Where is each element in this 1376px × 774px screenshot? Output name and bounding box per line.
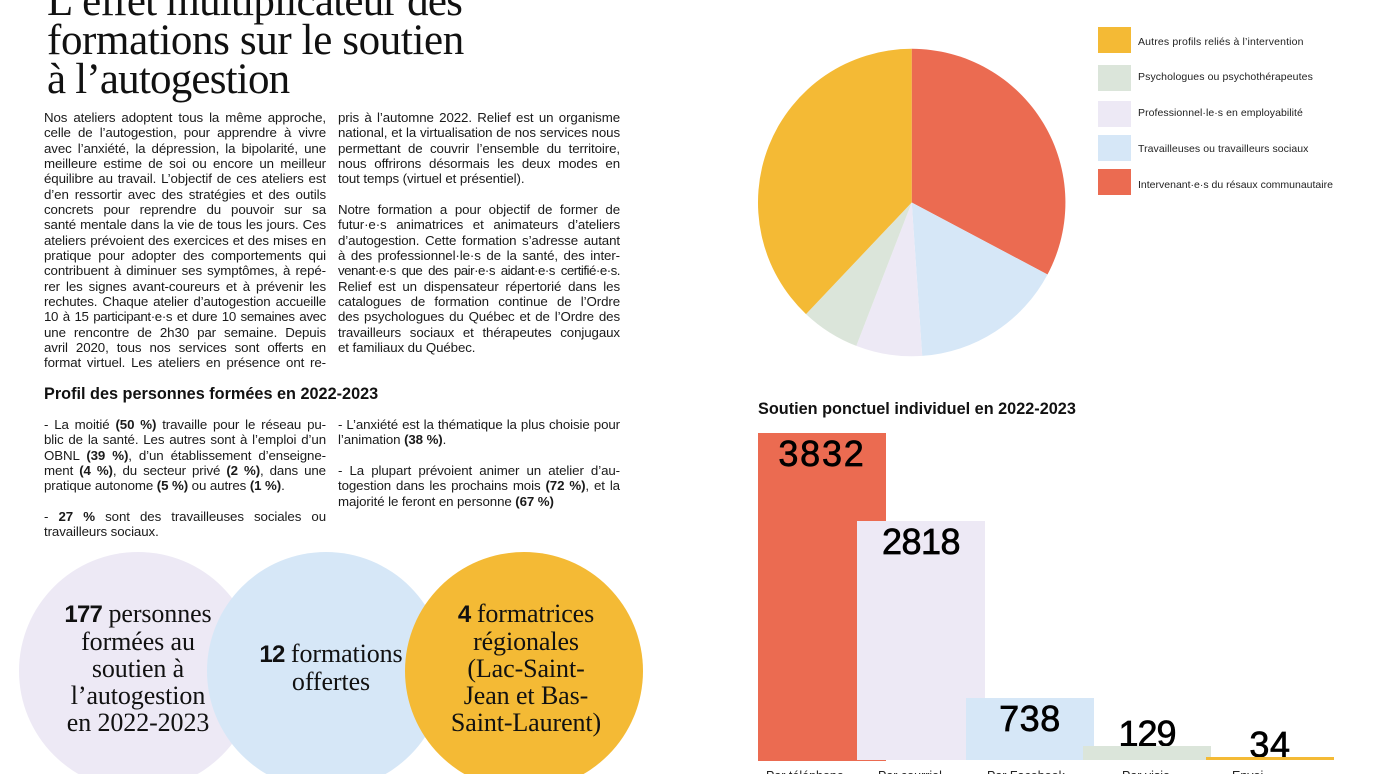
- heading: profil des personnes formées: Profil des personnes formées en 2022-2023: [44, 385, 378, 403]
- text block: intro column 1: avril 2020, tous nos services sont offerts en: [44, 340, 326, 355]
- text block: intro column 1: pratique pour adopter des comportements qui: [44, 248, 326, 263]
- text block: intro column 1: rechutes. Chaque atelier d’autogestion accueille: [44, 294, 326, 309]
- bar: 3832: [758, 433, 886, 761]
- text block: intro column 2: futur·e·s animatrices et animateurs d’ateliers: [338, 217, 620, 232]
- circle text: 4 formatrices: Saint-Laurent): [451, 708, 601, 737]
- pie slice: employabilité: [856, 202, 922, 356]
- text block: intro column 1: une rencontre de 2h30 par semaine. Depuis: [44, 325, 326, 340]
- text block: profil column 1: blic de la santé. Les autres sont à l’emploi d’un: [44, 432, 326, 447]
- value: 738: 738: [999, 698, 1061, 739]
- text block: intro column 1: ateliers prévoient des exercices et des mises en: [44, 233, 326, 248]
- text block: intro column 2: à des professionnel·le·s de la santé, des inter-: [338, 248, 620, 263]
- bar: 738: [966, 698, 1094, 760]
- text block: intro column 2: Relief est un dispensateur répertorié dans les: [338, 279, 620, 294]
- text block: intro column 2: Notre formation a pour objectif de former de: [338, 202, 620, 217]
- circle text: 177 personnes: [64, 599, 212, 737]
- circle text: 12 formations: offertes: [292, 667, 370, 696]
- pie slice: travailleuses sociales: [912, 202, 1048, 356]
- value: 3832: 3832: [778, 433, 866, 474]
- text block: intro column 1: concrets pour reprendre du pouvoir sur sa: [44, 202, 326, 217]
- legend swatch: employabilité: [1098, 101, 1131, 127]
- text block: intro column 2: des psychologues du Québec et de l’Ordre des: [338, 309, 620, 324]
- circle: formatrices régionales: [405, 552, 643, 774]
- circle text: 4 formatrices: [451, 599, 601, 737]
- value: 34: 34: [1249, 724, 1291, 765]
- text block: intro column 1: d’en ressortir avec des stratégies et des outils: [44, 187, 326, 202]
- text block: intro column 1: contribuent à diminuer ses symptômes, à repé-: [44, 263, 326, 278]
- legend label: autres profils: Autres profils reliés à l’intervention: [1138, 36, 1304, 48]
- text block: intro column 1: format virtuel. Les ateliers en présence ont re-: [44, 355, 326, 370]
- text block: intro column 1: rer les signes avant-coureurs et à prévenir les: [44, 279, 326, 294]
- text block: profil column 2: l’animation (38 %).: [338, 432, 446, 447]
- text block: profil column 1: - 27 % sont des travailleuses sociales ou: [44, 509, 326, 524]
- circle: formations offertes: [207, 552, 445, 774]
- text block: intro column 2: d’autogestion. Cette formation s’adresse autant: [338, 233, 620, 248]
- text block: profil column 2: majorité le feront en personne (67 %): [338, 494, 554, 509]
- text block: profil column 1: [44, 417, 326, 539]
- text block: profil column 2: - La plupart prévoient animer un atelier d’au-: [338, 463, 620, 478]
- text block: intro column 1: avec l’anxiété, la dépression, la bipolarité, une: [44, 141, 326, 156]
- circle text: 177 personnes: formées au: [81, 627, 195, 656]
- text block: intro column 1: santé mentale dans la vie de tous les jours. Ces: [44, 217, 326, 232]
- text block: profil column 1: ment (4 %), du secteur privé (2 %), dans une: [44, 463, 326, 478]
- circle text: 4 formatrices: Jean et Bas-: [464, 681, 588, 710]
- circle: personnes formées: [19, 552, 257, 774]
- legend label: travailleuses sociales: Travailleuses ou travailleurs sociaux: [1138, 143, 1308, 155]
- text block: intro column 1: Nos ateliers adoptent tous la même approche,: [44, 110, 326, 125]
- text block: intro column 2: venant·e·s que des pair·e·s aidant·e·s certifié·e·s.: [338, 263, 620, 278]
- value: 129: 129: [1118, 713, 1176, 754]
- pie slice: autres profils: [758, 49, 912, 314]
- text block: profil column 2: [338, 417, 620, 509]
- text block: profil column 2: - L’anxiété est la thématique la plus choisie pour: [338, 417, 620, 432]
- circle text: 4 formatrices: régionales: [473, 627, 579, 656]
- bar: 2818: [857, 521, 985, 760]
- text block: intro column 2: national, et la virtualisation de nos services nous: [338, 125, 620, 140]
- title: formations sur le soutien: [47, 17, 464, 64]
- bar: 129: [1083, 746, 1211, 760]
- pie slice: intervenant·e·s: [912, 49, 1065, 274]
- legend swatch: autres profils: [1098, 27, 1131, 53]
- pie slice: psychologues: [806, 202, 912, 346]
- bar: 34: [1206, 757, 1334, 760]
- text block: profil column 1: pratique autonome (5 %) ou autres (1 %).: [44, 478, 285, 493]
- bar chart: [758, 433, 1334, 774]
- text block: intro column 1: meilleure estime de soi ou encore un meilleur: [44, 156, 326, 171]
- legend: [1098, 27, 1333, 195]
- circle text: 177 personnes: en 2022-2023: [67, 708, 209, 737]
- text block: intro column 1: équilibre au travail. L’objectif de ces ateliers est: [44, 171, 326, 186]
- text block: intro column 2: pris à l’automne 2022. Relief est un organisme: [338, 110, 620, 125]
- text block: intro column 2: travailleurs sociaux et thérapeutes conjugaux: [338, 325, 620, 340]
- circle text: 177 personnes: 177 personnes: [64, 599, 212, 628]
- text block: intro column 2: permettant de couvrir l’ensemble du territoire,: [338, 141, 620, 156]
- text block: intro column 1: celle de l’autogestion, pour apprendre à vivre: [44, 125, 326, 140]
- circle text: 177 personnes: soutien à: [92, 654, 184, 683]
- circle text: 4 formatrices: 4 formatrices: [458, 599, 594, 628]
- text block: intro column 1: [44, 110, 326, 370]
- text block: profil column 1: OBNL (39 %), d’un établissement d’enseigne-: [44, 448, 326, 463]
- text block: intro column 2: nous offrirons désormais les deux modes en: [338, 156, 620, 171]
- legend label: intervenant·e·s: Intervenant·e·s du résaux communautaire: [1138, 179, 1333, 191]
- pie chart: [758, 48, 1066, 356]
- title: [47, 0, 464, 103]
- text block: intro column 2: [338, 110, 620, 355]
- text block: intro column 2: tout temps (virtuel et présentiel).: [338, 171, 524, 186]
- text block: profil column 1: travailleurs sociaux.: [44, 524, 159, 539]
- text block: intro column 2: et familiaux du Québec.: [338, 340, 475, 355]
- circle text: 12 formations: 12 formations: [259, 639, 403, 668]
- circle text: 177 personnes: l’autogestion: [71, 681, 205, 710]
- text block: profil column 1: - La moitié (50 %) travaille pour le réseau pu-: [44, 417, 326, 432]
- circle text: 4 formatrices: (Lac-Saint-: [467, 654, 585, 683]
- legend swatch: intervenant·e·s: [1098, 169, 1131, 195]
- text block: intro column 1: 10 à 15 participant·e·s et dure 10 semaines avec: [44, 309, 326, 324]
- text block: intro column 2: catalogues de formation continue de l’Ordre: [338, 294, 620, 309]
- legend label: employabilité: Professionnel·le·s en employabilité: [1138, 107, 1303, 119]
- circle text: 12 formations: [259, 639, 403, 696]
- text block: profil column 2: togestion dans les prochains mois (72 %), et la: [338, 478, 620, 493]
- legend label: psychologues: Psychologues ou psychothérapeutes: [1138, 71, 1313, 83]
- legend swatch: travailleuses sociales: [1098, 135, 1131, 161]
- legend swatch: psychologues: [1098, 65, 1131, 91]
- heading: soutien ponctuel: Soutien ponctuel individuel en 2022-2023: [758, 400, 1076, 418]
- title: à l’autogestion: [47, 56, 289, 103]
- value: 2818: 2818: [882, 521, 960, 562]
